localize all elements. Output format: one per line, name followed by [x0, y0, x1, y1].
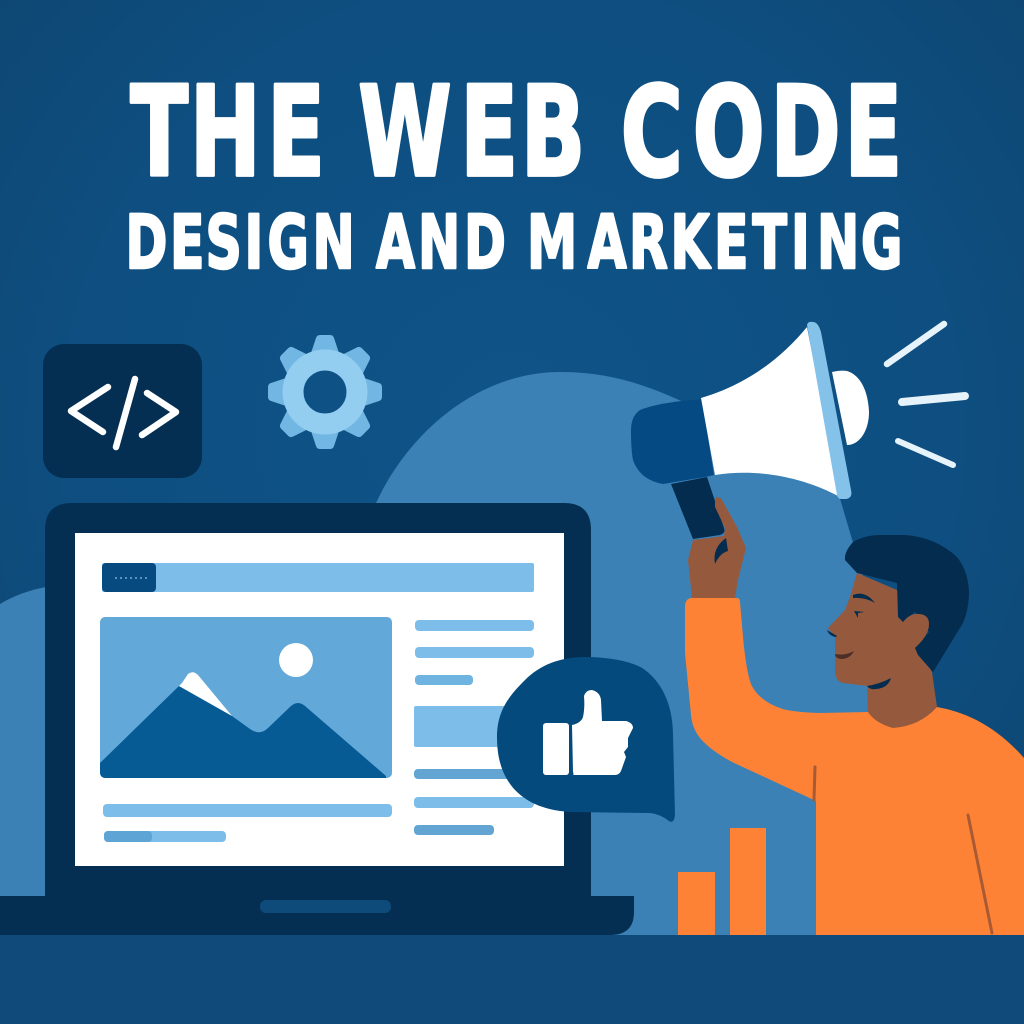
browser address bar: [102, 563, 534, 592]
title: THE WEB CODE: [131, 62, 902, 206]
hand: [688, 497, 746, 598]
sweater: [685, 598, 1024, 935]
sound lines: [887, 324, 965, 465]
image placeholder: [100, 617, 392, 778]
laptop: [0, 503, 634, 935]
subtitle: DESIGN AND MARKETING: [125, 199, 902, 286]
ground band: [0, 935, 1024, 1024]
person: [685, 497, 1024, 935]
icon: thumbs up: [543, 690, 633, 775]
bar chart: [678, 828, 766, 935]
hair: [845, 535, 969, 672]
like speech bubble: [497, 657, 675, 822]
laptop screen: [75, 533, 564, 866]
megaphone: [631, 322, 869, 539]
icon: gear: [268, 335, 382, 449]
neck and face: [828, 573, 937, 728]
face details: [827, 594, 891, 689]
icon: code tag: [43, 344, 202, 478]
content lines: [103, 620, 534, 842]
ear: [900, 614, 929, 648]
background hill shapes: [0, 372, 870, 935]
